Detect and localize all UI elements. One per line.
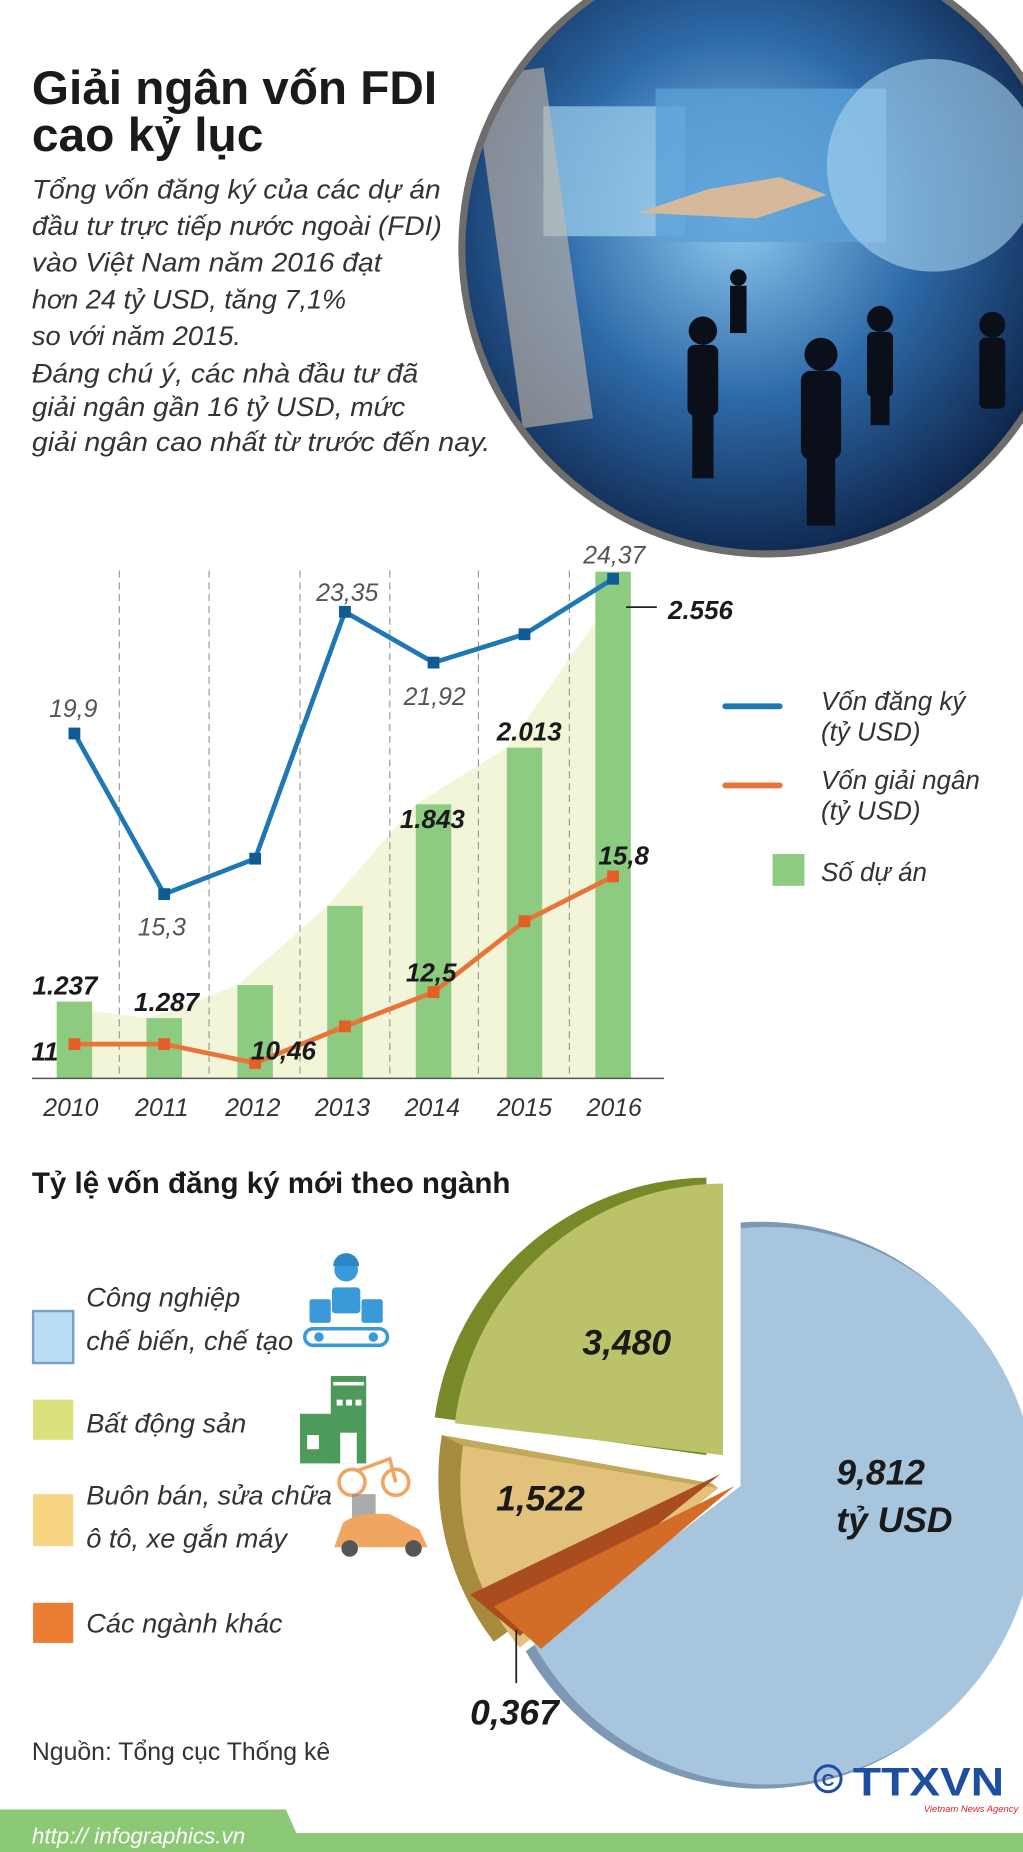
- intro text: vào Việt Nam năm 2016 đạt: [32, 247, 383, 278]
- intro text: giải ngân cao nhất từ trước đến nay.: [32, 426, 490, 457]
- title: cao kỷ lục: [32, 109, 263, 162]
- footer bar with url: http:// infographics.vn: [32, 1824, 245, 1849]
- value labels: 21,92: [403, 684, 466, 711]
- slice: real estate (green): [435, 1178, 723, 1455]
- year axis labels: 2016: [586, 1095, 642, 1122]
- footer bar with url: [0, 1809, 1023, 1852]
- chart: FDI line and bar chart: 12,5: [406, 958, 457, 988]
- year axis labels: 2014: [404, 1095, 460, 1122]
- chart: FDI line and bar chart: 1.237: [32, 971, 99, 1001]
- chart: FDI line and bar chart: 15,8: [598, 841, 650, 871]
- pie labels: [470, 1323, 952, 1732]
- chart legend: (tỷ USD): [821, 717, 921, 747]
- value labels: [49, 542, 647, 941]
- pie legend: Bất động sản: [86, 1408, 246, 1439]
- bars: number of projects: [57, 572, 631, 1078]
- pie labels: 0,367: [470, 1692, 561, 1732]
- slice: other sectors (orange): [470, 1474, 735, 1649]
- chart legend: Vốn đăng ký: [821, 686, 967, 716]
- orange line: disbursed capital: [69, 870, 619, 1069]
- pie legend: [33, 1281, 332, 1643]
- value labels: 24,37: [582, 542, 647, 569]
- chart: FDI line and bar chart: 1.287: [134, 987, 201, 1017]
- chart legend: Vốn giải ngân: [821, 765, 980, 795]
- pie chart: registered capital by sector: [435, 1178, 1023, 1789]
- chart legend: Số dự án: [821, 857, 927, 887]
- chart: FDI line and bar chart: 11: [31, 1037, 58, 1067]
- slice: processing & manufacturing (blue): [526, 1222, 1023, 1789]
- intro text: giải ngân gần 16 tỷ USD, mức: [32, 391, 406, 422]
- intro text: đầu tư trực tiếp nước ngoài (FDI): [32, 210, 442, 241]
- pie labels: 3,480: [582, 1323, 671, 1363]
- chart: FDI line and bar chart: [31, 542, 734, 1122]
- pie legend: Buôn bán, sửa chữa: [86, 1480, 332, 1511]
- pie labels: 1,522: [496, 1479, 585, 1519]
- pie labels: 9,812: [836, 1453, 925, 1493]
- section heading: Tỷ lệ vốn đăng ký mới theo ngành: [32, 1167, 510, 1200]
- year axis labels: 2010: [42, 1095, 99, 1122]
- logo: TTXVN: TTXVN: [853, 1759, 1004, 1804]
- intro text: [32, 173, 490, 457]
- blue line: registered capital: [69, 573, 619, 900]
- intro text: hơn 24 tỷ USD, tăng 7,1%: [32, 283, 346, 314]
- icon: car and motorbike: [334, 1459, 428, 1557]
- logo: TTXVN: C: [822, 1770, 835, 1790]
- logo: TTXVN: [815, 1759, 1019, 1815]
- chart: FDI line and bar chart: 2.556: [667, 595, 734, 625]
- icon: building: [300, 1376, 366, 1463]
- slice: trade & repair (yellow): [438, 1435, 718, 1648]
- chart: FDI line and bar chart: 1.843: [400, 804, 465, 834]
- chart: FDI line and bar chart: 2.013: [496, 717, 562, 747]
- value labels: 23,35: [315, 580, 379, 607]
- title: [32, 62, 437, 162]
- pie legend: Các ngành khác: [86, 1607, 283, 1638]
- chart legend: [725, 686, 980, 887]
- pie legend: chế biến, chế tạo: [86, 1325, 293, 1356]
- year axis labels: 2015: [496, 1095, 552, 1122]
- chart legend: (tỷ USD): [821, 796, 921, 826]
- value labels: 19,9: [49, 696, 98, 723]
- year axis labels: 2013: [314, 1095, 370, 1122]
- year axis labels: 2012: [224, 1095, 281, 1122]
- pie legend: Công nghiệp: [86, 1281, 240, 1312]
- value labels: 15,3: [138, 914, 186, 941]
- title: Giải ngân vốn FDI: [32, 62, 437, 115]
- intro text: so với năm 2015.: [32, 320, 241, 351]
- photo circle: business handshake: [458, 0, 1023, 557]
- logo: TTXVN: Vietnam News Agency: [924, 1804, 1019, 1815]
- pie legend: ô tô, xe gắn máy: [86, 1522, 288, 1553]
- chart: FDI line and bar chart: 10,46: [251, 1035, 317, 1065]
- year axis labels: [42, 1095, 642, 1122]
- icon: factory worker: [305, 1253, 387, 1345]
- pie labels: tỷ USD: [836, 1500, 952, 1540]
- intro text: Tổng vốn đăng ký của các dự án: [32, 173, 441, 204]
- year axis labels: 2011: [134, 1095, 189, 1122]
- source: Nguồn: Tổng cục Thống kê: [32, 1739, 330, 1766]
- intro text: Đáng chú ý, các nhà đầu tư đã: [32, 358, 418, 389]
